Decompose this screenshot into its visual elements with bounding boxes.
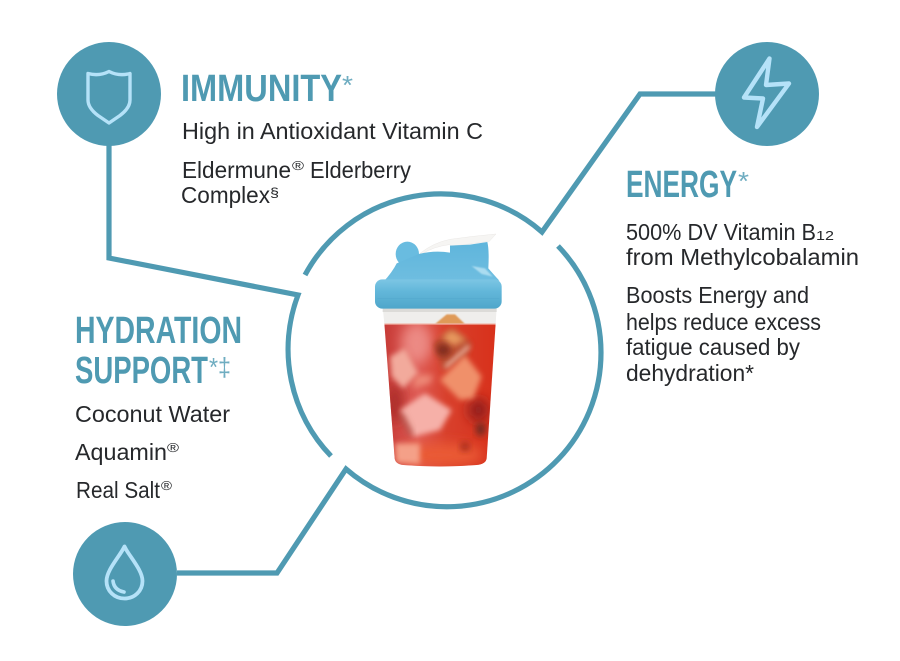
connector: energy line and top arc [305, 94, 717, 275]
heading: immunity: IMMUNITY [181, 68, 342, 110]
text block: immunity: High in Antioxidant Vitamin C [182, 118, 483, 144]
text block: hydration support: SUPPORT [75, 350, 208, 392]
liquid [383, 322, 498, 468]
cup collar [383, 307, 497, 324]
connector: immunity line and left arc [109, 140, 331, 456]
white flap [420, 234, 496, 254]
text block: energy: Boosts Energy and [626, 282, 809, 308]
text block: immunity: Complex [181, 182, 270, 208]
shaker bottle with red drink [375, 234, 502, 468]
text block: energy: 12 [816, 228, 834, 243]
text block: immunity: Eldermune [182, 157, 291, 183]
text block: hydration support: Real Salt [76, 477, 161, 503]
text block: immunity [181, 68, 483, 208]
text block: hydration support: *‡ [209, 352, 231, 382]
ice cube top [433, 328, 472, 370]
lid [375, 234, 502, 309]
text block: hydration support [75, 310, 242, 503]
text block: hydration support: ® [167, 440, 180, 455]
ice above liquid [435, 314, 465, 324]
heading: hydration support: HYDRATION [75, 310, 242, 352]
text block: energy: dehydration* [626, 360, 754, 386]
lid rim [375, 279, 502, 309]
ice cube right [440, 355, 482, 400]
text block: energy [626, 164, 859, 386]
text block: hydration support: ® [161, 478, 172, 493]
lid knob [396, 242, 419, 266]
ice cube left [390, 348, 418, 388]
text block: immunity: * [342, 70, 353, 100]
text block: energy: * [738, 166, 749, 196]
icon: shield [57, 42, 161, 146]
connector: hydration line and bottom right arc [177, 246, 601, 573]
text block: immunity: § [270, 185, 279, 200]
icon: water drop [73, 522, 177, 626]
text block: energy: from Methylcobalamin [626, 244, 859, 270]
text block: immunity: ® [292, 158, 305, 173]
text block: hydration support: Coconut Water [75, 401, 230, 427]
cup and drink [383, 307, 498, 468]
icon: lightning bolt [715, 42, 819, 146]
dark spots [476, 423, 485, 436]
ice cube large [400, 393, 452, 437]
lid dome and spout [383, 242, 499, 283]
text block: energy: fatigue caused by [626, 334, 800, 360]
infographic canvas [57, 42, 858, 626]
text block: hydration support: Aquamin [75, 439, 167, 465]
text block: energy: helps reduce excess [626, 309, 821, 335]
text block: energy: 500% DV Vitamin B [626, 219, 816, 245]
heading: energy: ENERGY [626, 164, 737, 206]
ice cube bottom left [395, 443, 420, 464]
text block: immunity: Elderberry [310, 157, 411, 183]
